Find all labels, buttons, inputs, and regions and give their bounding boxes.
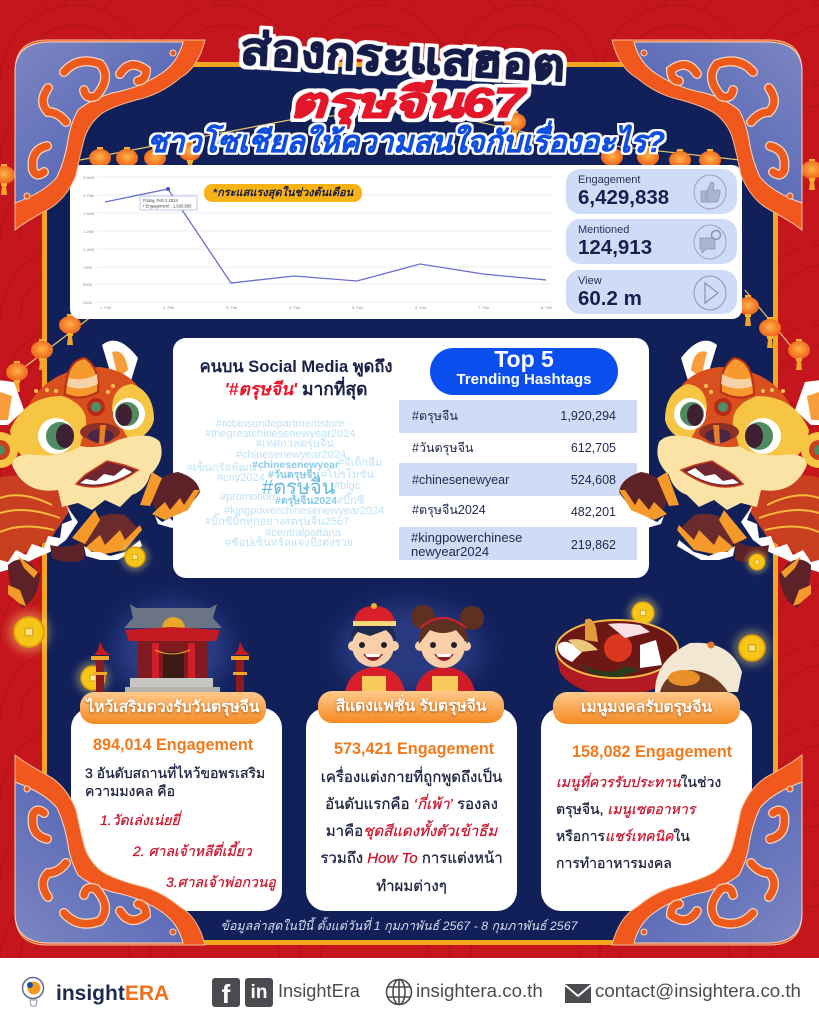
line chart: 4. Feb [289, 305, 301, 310]
heading: social media: คนบน Social Media พูดถึง [200, 358, 392, 376]
row 5 [399, 527, 637, 560]
table: top hashtags [399, 400, 637, 560]
row 3: 524,608 [571, 473, 616, 487]
word cloud: #จีเด็กลื่ม [338, 457, 382, 469]
KPI card: engagement: Engagement [578, 174, 640, 186]
line chart: 500K [83, 282, 93, 287]
word cloud: #ตรุษจีน2024 [275, 495, 337, 507]
pill: top 5 trending hashtags: Top 5 [494, 346, 554, 372]
body text: 1.วัดเล่งเน่ยยี่ [100, 812, 180, 828]
card header: fashion: สีแดงแฟชั่น รับตรุษจีน [336, 698, 486, 715]
engagement figure: 894,014 Engagement [93, 736, 253, 754]
card header: fashion [318, 691, 504, 723]
email: contact@insightera.co.th [595, 980, 801, 1001]
pill: top 5 trending hashtags: Trending Hashtags [456, 371, 592, 388]
row 1: 1,920,294 [560, 409, 616, 423]
row 2: 612,705 [571, 441, 616, 455]
word cloud: #เข็นกรัลพัฒนา [187, 462, 262, 474]
body text [556, 772, 721, 871]
row 2 [412, 441, 616, 456]
row 3: #chinesenewyear [412, 473, 509, 487]
word cloud [187, 418, 384, 549]
row 1 [399, 400, 637, 433]
icon: lucky food [555, 618, 742, 692]
line chart: 1.25M [83, 229, 94, 234]
word cloud: #bigc [334, 480, 360, 492]
line chart: 6. Feb [415, 305, 427, 310]
card: praying [71, 708, 282, 911]
logo [22, 976, 169, 1006]
icon: play [694, 276, 726, 310]
logo: insightERA [56, 982, 169, 1005]
line chart: 8. Feb [541, 305, 553, 310]
body text: อันดับแรกคือ ‘กี่เพ้า’ รองลง [325, 796, 498, 813]
body text: ตรุษจีน, เมนูเซตอาหาร [556, 801, 695, 817]
body text: ความมงคล คือ [85, 783, 175, 799]
body text [320, 766, 503, 895]
KPI card: engagement [566, 169, 737, 214]
word cloud: #ตรุษจีน [262, 477, 335, 499]
body text: มาคือชุดสีแดงทั้งตัวเข้าธีม [326, 823, 497, 840]
word cloud: #centralpattana [265, 527, 341, 539]
body text: หรือการแชร์เทคนิคใน [556, 828, 690, 844]
body text: เครื่องแต่งกายที่ถูกพูดถึงเป็น [321, 769, 502, 786]
icon: facebook [212, 978, 240, 1007]
body text: รวมถึง How To การแต่งหน้า [320, 850, 503, 867]
engagement figure: 573,421 Engagement [334, 740, 494, 758]
panel: engagement trend chart [70, 165, 742, 319]
KPI card: mentioned: Mentioned [578, 224, 629, 236]
line chart [83, 175, 553, 310]
line chart: • Engagement : 1,826,895 [143, 204, 192, 208]
body text: 2. ศาลเจ้าหลีตี่เมี้ยว [133, 843, 252, 859]
body text: การทำอาหารมงคล [556, 855, 672, 871]
word cloud: #โปรโมชั่น [321, 469, 374, 481]
word cloud: #promotion [220, 491, 275, 503]
title [147, 25, 667, 159]
word cloud: #บิ๊กซีบิ๊กทุกอย่าง#ตรุษจีน2567 [205, 516, 349, 528]
icon: shrine [91, 594, 250, 692]
word cloud: #วันตรุษจีน [268, 469, 320, 481]
engagement figure: 158,082 Engagement [572, 743, 732, 761]
icon: children in red clothes [332, 596, 488, 691]
line chart: 3.75M [83, 193, 94, 198]
title line 1: ส่องกระแสฮอต [239, 25, 566, 90]
card header: food [553, 692, 740, 724]
word cloud: #robinsondepartmentstore [216, 418, 344, 430]
line chart: 1. Feb [100, 305, 112, 310]
word cloud: #kingpowerchinesenewyear2024 [224, 505, 384, 517]
note badge [204, 184, 362, 202]
card: fashion [306, 708, 517, 911]
line chart: 750K [83, 265, 93, 270]
icon: lightbulb [22, 976, 44, 1006]
row 4: #ตรุษจีน2024 [412, 503, 486, 517]
row 5: 219,862 [571, 538, 616, 552]
card header: food: เมนูมงคลรับตรุษจีน [581, 699, 712, 716]
line chart: 1.50M [83, 211, 94, 216]
row 5: newyear2024 [411, 544, 489, 559]
body text: 3 อันดับสถานที่ไหว้ขอพรเสริม [85, 765, 265, 781]
icon: globe [386, 978, 412, 1006]
KPI card: view [566, 270, 737, 314]
icon: linkedin: in [251, 982, 267, 1003]
word cloud: #ช้อปเซ็นทรัลแจงปังต่งรวย [225, 537, 353, 549]
row 5: #kingpowerchinese [411, 530, 522, 545]
pill: top 5 trending hashtags [430, 348, 618, 395]
line chart: 5. Feb [352, 305, 364, 310]
line chart: 2. Feb [163, 305, 175, 310]
word cloud: #chinesenewyear2024 [236, 449, 346, 461]
footer [0, 958, 819, 1024]
card header: praying: ไหว้เสริมดวงรับวันตรุษจีน [86, 699, 260, 716]
KPI card: mentioned: 124,913 [578, 236, 652, 259]
icon: thumbs up [694, 174, 726, 210]
row 3 [399, 463, 637, 496]
word cloud: #cny2024 [217, 472, 265, 484]
icon: linkedin [245, 978, 273, 1007]
icon: speech bubble [694, 224, 726, 260]
row 4: 482,201 [571, 505, 616, 519]
line chart: 3. Feb [226, 305, 238, 310]
line chart: 1.00M [83, 247, 94, 252]
row 2: #วันตรุษจีน [412, 441, 473, 455]
word cloud: #บิ๊กซี [337, 495, 364, 507]
heading: social media [200, 358, 392, 400]
word cloud: #thegreatchinesenewyear2024 [205, 428, 355, 440]
KPI card: mentioned [566, 219, 737, 264]
website: insightera.co.th [416, 980, 543, 1001]
card header: praying [80, 692, 266, 724]
title line 3: ชาวโซเชียลให้ความสนใจกับเรื่องอะไร? [147, 120, 665, 159]
line chart: 3.86M [83, 175, 94, 180]
KPI card: view: View [578, 275, 602, 287]
panel: social media hashtags [173, 338, 649, 578]
data date note: ข้อมูลล่าสุดในปีนี้ ตั้งแต่วันที่ 1 กุมภาพันธ์ 2567 - 8 กุมภาพันธ์ 2567 [220, 919, 577, 933]
body text: 3.ศาลเจ้าพ่อกวนอู [166, 874, 276, 890]
navy main panel with gold frame [42, 62, 778, 945]
word cloud: #chinesenewyear [252, 459, 339, 471]
heading: social media: '#ตรุษจีน' มากที่สุด [224, 379, 367, 399]
body text [85, 764, 276, 891]
card: food [541, 708, 752, 911]
line chart: 7. Feb [478, 305, 490, 310]
row 1: #ตรุษจีน [412, 409, 458, 423]
word cloud: #เทศกาลตรุษจีน [256, 438, 334, 450]
KPI card: view: 60.2 m [578, 287, 642, 310]
icon: facebook: f [222, 979, 230, 1009]
row 4 [412, 503, 616, 519]
body text: ทำผมต่างๆ [376, 878, 447, 895]
KPI card: engagement: 6,429,838 [578, 186, 669, 209]
line chart: Friday, Feb 2 2024 [143, 198, 179, 203]
social name: InsightEra [278, 981, 360, 1001]
title line 2: ตรุษจีน67 [290, 79, 527, 129]
icon: mail [565, 984, 591, 1003]
body text: เมนูที่ควรรับประทานในช่วง [556, 774, 721, 790]
line chart: 250K [83, 300, 93, 305]
note badge: *กระแสแรงสุดในช่วงต้นเดือน [213, 187, 353, 199]
